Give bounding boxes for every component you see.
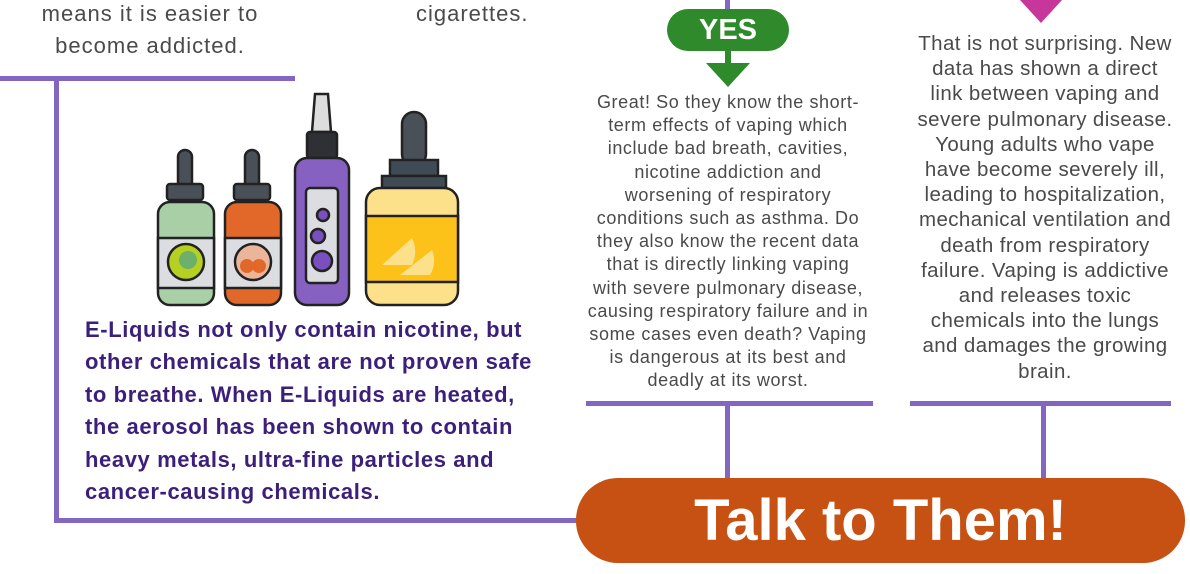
badge: YES with arrow (667, 9, 789, 87)
text: e-liquids explanation: E-Liquids not only contain nicotine, but (85, 317, 522, 342)
text: e-liquids explanation: cancer-causing chemicals. (85, 479, 380, 504)
text: no branch response: data has shown a direct (932, 57, 1158, 80)
text: yes branch response: deadly at its worst. (647, 370, 809, 390)
text: yes branch response: term effects of vaping which (608, 115, 848, 135)
text: yes branch response: causing respiratory failure and in (588, 301, 868, 321)
text: no branch response: and damages the growing (922, 334, 1168, 357)
text: yes branch response: Great! So they know the short- (597, 92, 859, 112)
text: addicted fragment (42, 1, 258, 58)
arrow: pink no-branch (1020, 0, 1062, 23)
text: yes branch response: conditions such as asthma. Do (597, 208, 859, 228)
text: addicted fragment: means it is easier to (42, 1, 258, 26)
text: e-liquids explanation: heavy metals, ultra-fine particles and (85, 447, 494, 472)
text: no branch response: have become severely ill, (925, 158, 1165, 181)
text: yes branch response: worsening of respiratory (625, 185, 831, 205)
connector: left flow line (0, 76, 576, 523)
connector: no branch bottom (910, 401, 1171, 478)
text: no branch response: brain. (1018, 360, 1072, 383)
text: e-liquids explanation: to breathe. When E-Liquids are heated, (85, 382, 515, 407)
text: yes branch response: they also know the recent data (597, 231, 859, 251)
connector: top of yes branch (725, 0, 730, 12)
text: no branch response: chemicals into the lungs (931, 309, 1159, 332)
text: no branch response: link between vaping and (930, 82, 1160, 105)
text: yes branch response (588, 92, 868, 390)
text: e-liquids explanation (85, 317, 532, 504)
text: yes branch response: that is directly linking vaping (607, 254, 849, 274)
text: yes branch response: nicotine addiction and (634, 162, 822, 182)
badge: YES with arrow: YES (699, 14, 757, 46)
text: yes branch response: some cases even death? Vaping (589, 324, 867, 344)
text: yes branch response: include bad breath, cavities, (608, 138, 848, 158)
text: yes branch response: with severe pulmonary disease, (593, 278, 863, 298)
text: yes branch response: is dangerous at its best and (610, 347, 846, 367)
button: Talk to Them (576, 478, 1185, 563)
text: cigarettes fragment: cigarettes. (416, 1, 528, 26)
text: e-liquids explanation: other chemicals that are not proven safe (85, 349, 532, 374)
text: no branch response: failure. Vaping is addictive (921, 259, 1169, 282)
text: no branch response: Young adults who vape (935, 133, 1155, 156)
text: no branch response: and releases toxic (959, 284, 1131, 307)
connector: yes branch bottom (586, 401, 873, 478)
text: no branch response: leading to hospitalization, (924, 183, 1166, 206)
text: addicted fragment: become addicted. (55, 33, 245, 58)
text: no branch response (918, 32, 1172, 383)
button: Talk to Them: Talk to Them! (694, 488, 1067, 553)
text: no branch response: severe pulmonary disease. (918, 108, 1172, 131)
text: e-liquids explanation: the aerosol has been shown to contain (85, 414, 513, 439)
illustration: e-liquid bottles (156, 92, 460, 306)
text: no branch response: That is not surprising. New (918, 32, 1172, 55)
text: no branch response: death from respiratory (940, 234, 1150, 257)
text: no branch response: mechanical ventilation and (919, 208, 1171, 231)
